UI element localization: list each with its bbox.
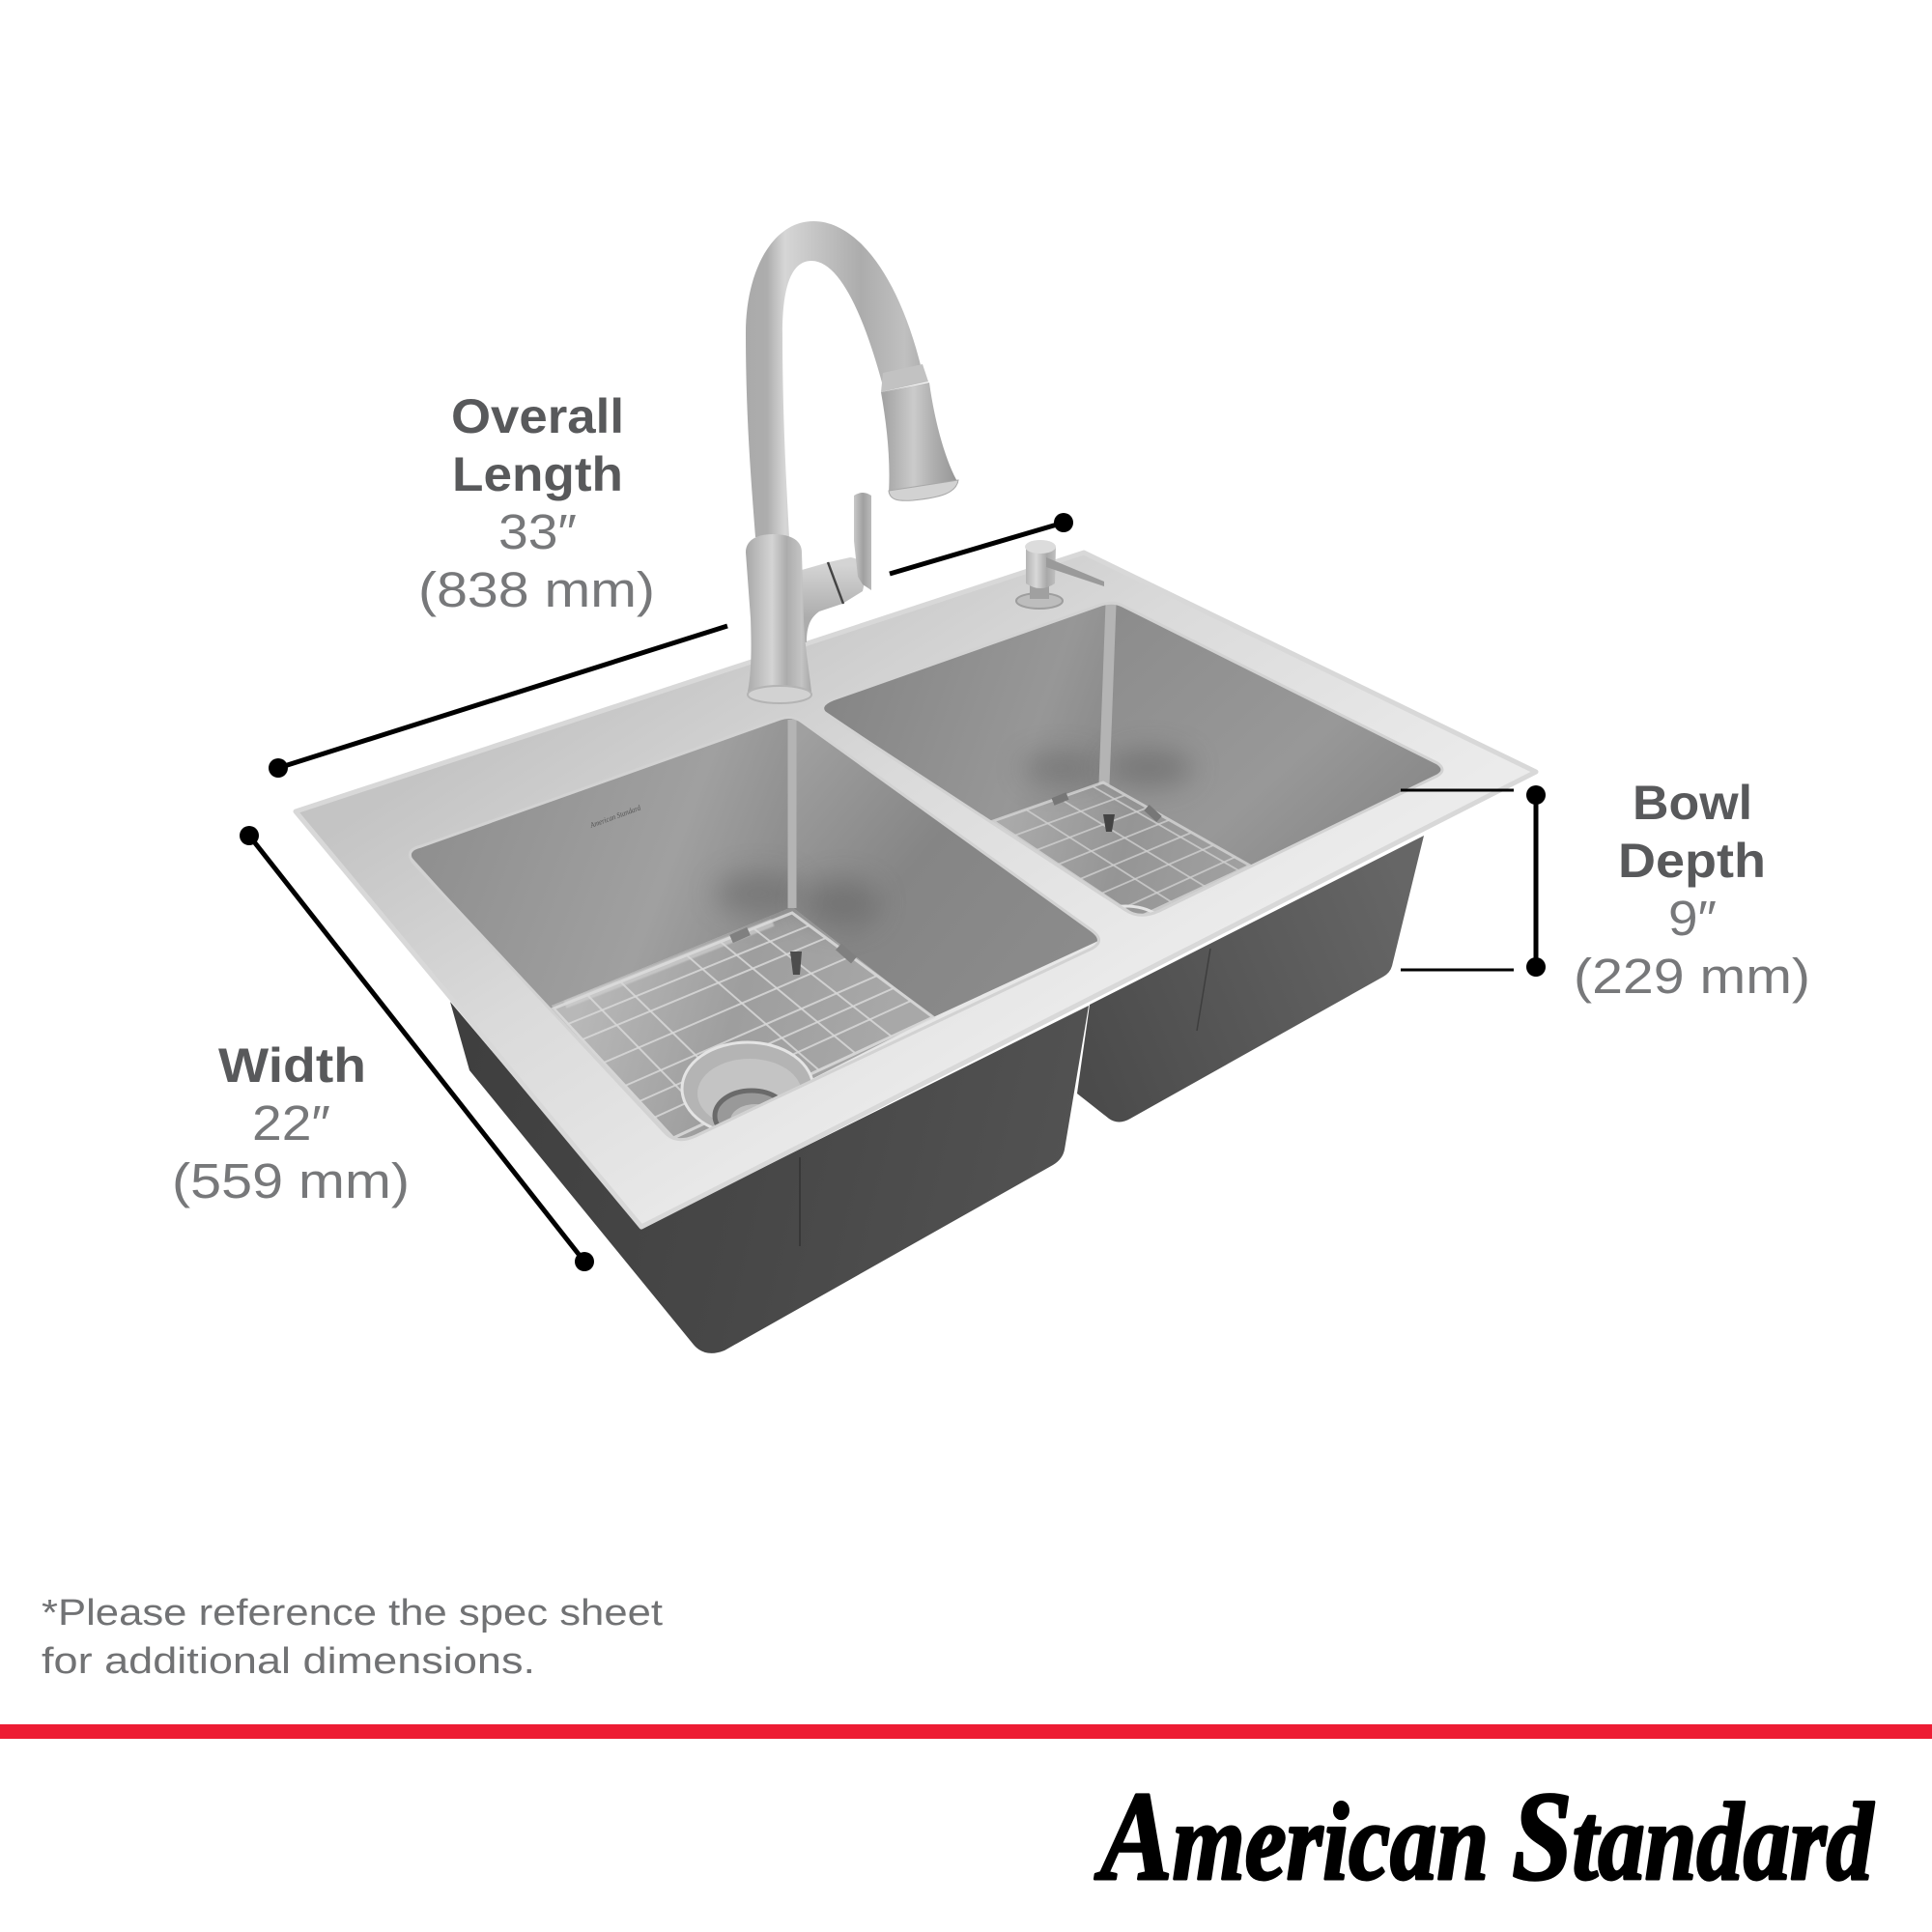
right rack wires [993,782,1250,918]
label: bowl depth: Depth [1618,834,1766,888]
left drain strainer [680,1041,813,1128]
brand logo: American Standard [1094,1765,1875,1907]
right drain arc [1121,904,1153,912]
right basin underside [1077,836,1424,1122]
right bowl [824,605,1441,914]
footnote: *Please reference the spec sheet [42,1593,664,1634]
left basin underside [450,1002,1089,1353]
left bowl rim [410,718,1098,1140]
label: overall length: Overall [451,389,624,443]
label: width: 22″ [252,1095,330,1151]
label: bowl depth [1574,776,1810,1004]
faucet [746,221,1104,703]
pull-down spray head [881,364,958,500]
label: bowl depth: Bowl [1633,776,1752,830]
handle lever [828,493,871,604]
left bowl [401,710,1111,1150]
label: width: (559 mm) [172,1153,410,1208]
label: overall length: (838 mm) [418,562,655,617]
right bowl rim [823,603,1442,915]
handle connector [798,557,865,642]
label: overall length [418,389,655,617]
label: overall length: Length [452,447,623,501]
faucet base ring [748,686,811,703]
dimension line: width [240,826,594,1271]
label: width: Width [218,1038,366,1093]
footnote [42,1593,664,1682]
dimension line: overall length [269,513,1073,778]
label: width [172,1038,410,1208]
red divider bar [0,1724,1932,1739]
dimension line: bowl depth [1401,785,1546,977]
label: bowl depth: 9″ [1668,891,1717,946]
label: bowl depth: (229 mm) [1574,949,1810,1004]
faucet body [746,534,811,701]
right rack clips [1053,796,1159,832]
label: overall length: 33″ [498,504,577,559]
sink deck [296,553,1536,1227]
left rack clips [731,931,854,975]
footnote: for additional dimensions. [42,1641,535,1682]
left rack wires [554,913,933,1138]
faucet spout [746,221,923,537]
small brand mark: American Standard [588,803,642,830]
sink illustration [296,553,1536,1353]
soap dispenser [1016,540,1104,609]
